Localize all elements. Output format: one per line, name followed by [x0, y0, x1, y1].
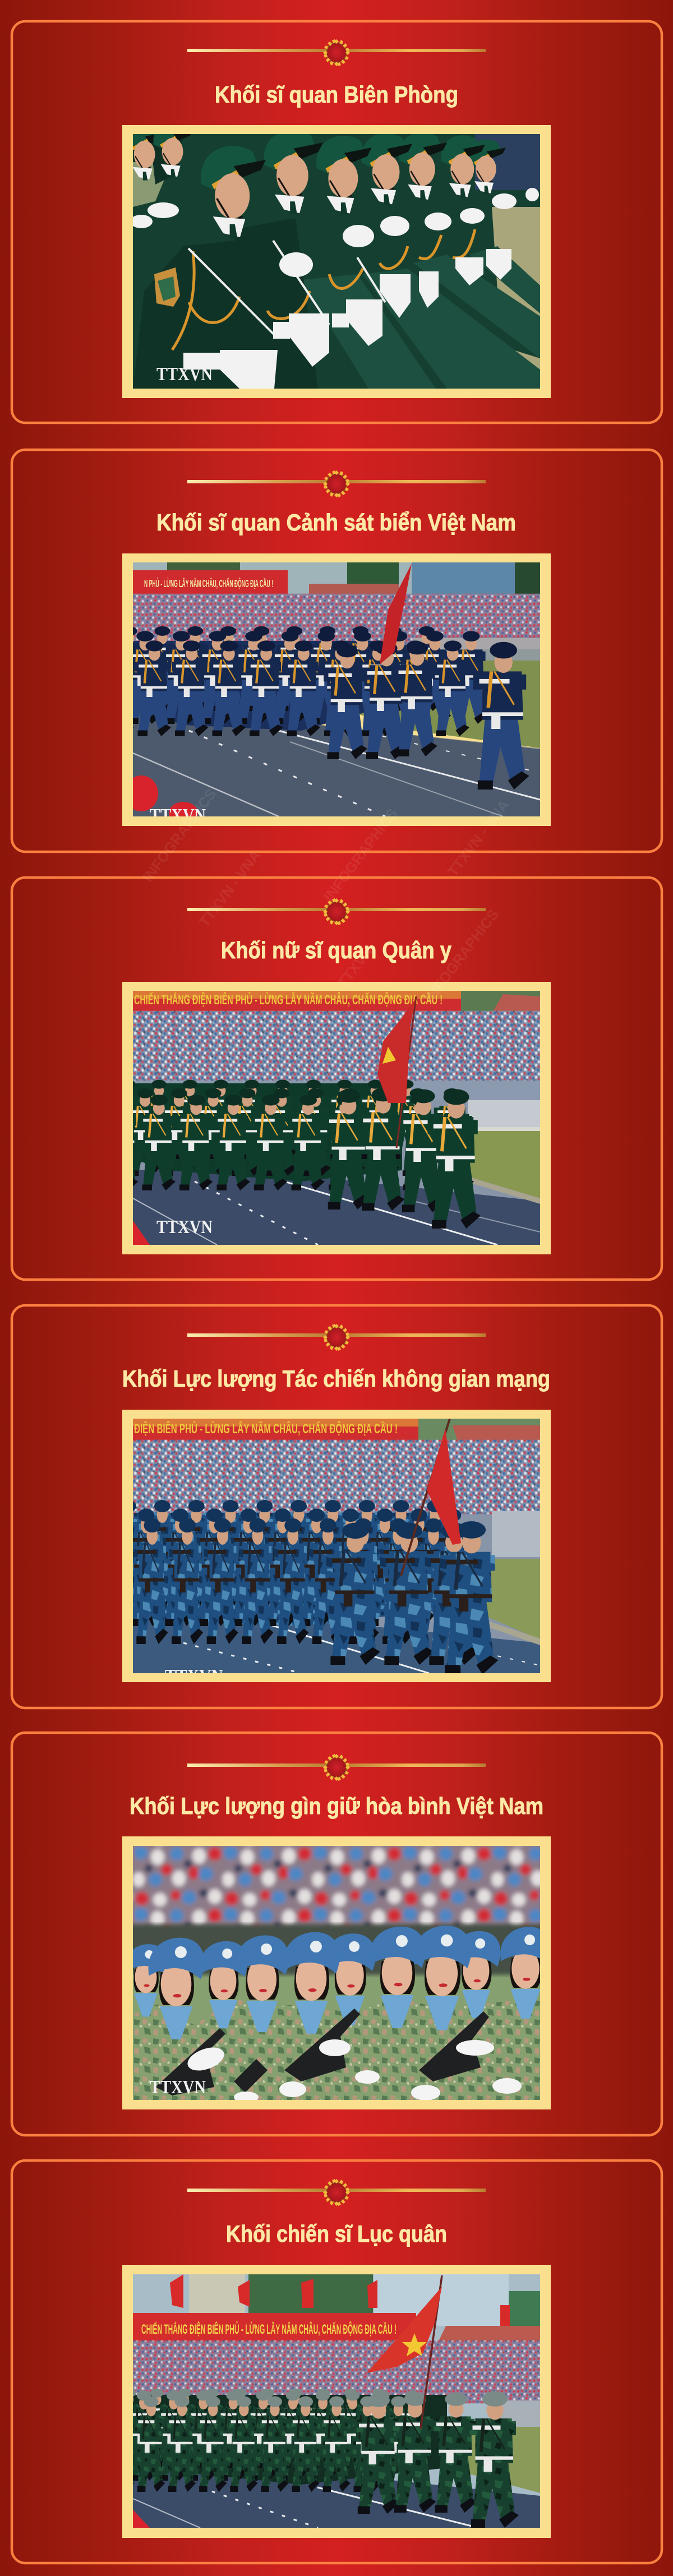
divider with medallion: [187, 898, 486, 925]
panel border: [12, 1305, 662, 1708]
flag: [401, 1419, 461, 1576]
watermark TTXVN: TTXVN: [150, 2077, 206, 2098]
divider with medallion: [187, 2179, 486, 2206]
panel: Khối chiến sĩ Lục quân: [12, 2160, 662, 2563]
panel border: [12, 450, 662, 852]
marching block: [104, 2389, 519, 2528]
panel: Khối sĩ quan Cảnh sát biển Việt Nam: [12, 450, 662, 852]
panel: Khối nữ sĩ quan Quân y: [12, 878, 662, 1280]
banner: ĐIỆN BIÊN PHỦ - LỪNG LẪY NĂM CHÂU, CHẤN ĐỘNG ĐỊA CẦU !: [134, 1420, 398, 1437]
photo: army soldiers: [133, 2274, 540, 2528]
watermark TTXVN: TTXVN: [156, 364, 213, 385]
watermarks: TTXVN: [334, 943, 376, 991]
flag: [367, 2275, 442, 2429]
flowers: [125, 775, 198, 824]
flag: [377, 996, 416, 1148]
rifles: [155, 2009, 489, 2095]
divider with medallion: [187, 470, 486, 497]
watermarks: [139, 786, 513, 1005]
divider with medallion: [187, 39, 486, 66]
marching block: [102, 1080, 481, 1229]
berets and faces: [126, 1926, 551, 2039]
heading: Khối Lực lượng Tác chiến không gian mạng: [122, 1365, 550, 1392]
watermarks: INFOGRAPHICS: [421, 906, 502, 1005]
photo frame: [122, 2265, 551, 2538]
photo frame: [122, 553, 551, 826]
photo: cyber operations force: [133, 1419, 540, 1687]
divider with medallion: [187, 1324, 486, 1351]
panel border: [12, 21, 662, 423]
photo: Vietnamese peacekeepers: [133, 1846, 540, 2100]
marching block: [98, 626, 529, 790]
banner: [133, 991, 461, 1012]
heading: Khối sĩ quan Biên Phòng: [215, 81, 458, 108]
watermarks: INFOGRAPHICS: [320, 805, 401, 904]
corner flower: [133, 2510, 150, 2528]
watermarks: INFOGRAPHICS: [139, 786, 220, 885]
photo frame: [122, 1410, 551, 1682]
panel: Khối Lực lượng gìn giữ hòa bình Việt Nam: [12, 1733, 662, 2135]
heading: Khối Lực lượng gìn giữ hòa bình Việt Nam: [130, 1793, 543, 1819]
photo: female military medics: [133, 991, 540, 1245]
heading: Khối nữ sĩ quan Quân y: [221, 937, 452, 963]
photo frame: [122, 125, 551, 398]
banner: [133, 2313, 416, 2344]
photo frame: [122, 1836, 551, 2109]
photo: border guard officers: [133, 134, 540, 389]
gloves: [185, 2039, 522, 2103]
panel border: [12, 1733, 662, 2135]
divider with medallion: [187, 1754, 486, 1781]
watermarks: TTXVN - VNA: [444, 796, 513, 880]
flag: [380, 564, 412, 664]
watermark TTXVN: TTXVN: [150, 805, 206, 826]
panel border: [12, 2160, 662, 2563]
banner: [133, 1419, 418, 1442]
photo frame: [122, 982, 551, 1254]
corner flower: [133, 1221, 150, 1245]
banner: [133, 570, 288, 595]
watermark TTXVN: TTXVN: [156, 1217, 213, 1238]
watermarks: TTXVN - VNA: [196, 847, 264, 930]
photo: coast guard officers: [133, 562, 540, 826]
panel border: [12, 878, 662, 1280]
heading: Khối chiến sĩ Lục quân: [226, 2220, 447, 2247]
heading: Khối sĩ quan Cảnh sát biển Việt Nam: [156, 509, 516, 535]
banner: N PHỦ - LỪNG LẪY NĂM CHÂU, CHẤN ĐỘNG ĐỊA CẦU !: [144, 578, 273, 589]
watermark TTXVN: TTXVN: [165, 1666, 223, 1687]
panel: Khối Lực lượng Tác chiến không gian mạng: [12, 1305, 662, 1708]
marching block: [99, 1500, 498, 1674]
panel: Khối sĩ quan Biên Phòng: [12, 21, 662, 423]
